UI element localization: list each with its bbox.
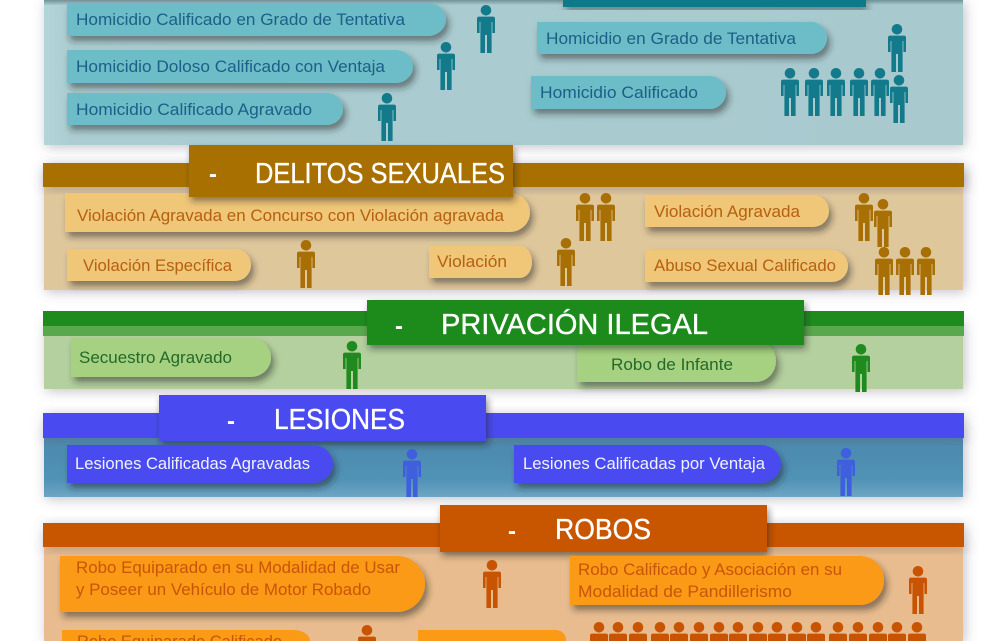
pill: Abuso Sexual Calificado [645, 250, 848, 282]
pill: Lesiones Calificadas por Ventaja: Lesiones Calificadas por Ventaja [523, 455, 766, 473]
heading: robos [440, 505, 767, 552]
pill: Robo Calificado y Asociación: Robo Calificado y Asociación en su [578, 561, 842, 579]
panel background: privación ilegal [44, 320, 963, 389]
panel background: homicidios [44, 0, 963, 145]
panel: lesiones [43, 395, 964, 497]
panel background: lesiones [44, 430, 963, 497]
pill: Robo Calificado y Asociación [570, 556, 884, 605]
panel: homicidios [44, 0, 963, 145]
band: privación ilegal [43, 311, 964, 336]
pill: Robo Equiparado en su Modalidad de Usar: y Poseer un Vehículo de Motor Robado [76, 581, 371, 599]
pill: Homicidio Calificado Agravado [67, 93, 343, 125]
pill: Homicidio Calificado: Homicidio Calificado [540, 84, 698, 102]
heading: delitos sexuales: DELITOS SEXUALES [255, 158, 505, 190]
band: delitos sexuales [43, 163, 964, 187]
icons: people privación ilegal [343, 341, 870, 392]
pill: Violación Agravada: Violación Agravada [654, 203, 801, 221]
pill: Robo Equiparado Calificado [62, 630, 310, 641]
heading: delitos sexuales: - [209, 161, 217, 188]
heading: privación ilegal: PRIVACIÓN ILEGAL [441, 308, 708, 341]
icons: people delitos sexuales [297, 193, 935, 295]
heading: lesiones: - [227, 408, 235, 435]
pill: Violación Específica [67, 249, 251, 281]
pill: Homicidio Doloso Calificado con Ventaja [67, 50, 413, 83]
heading: delitos sexuales [189, 145, 513, 197]
pill: Robo de Infante [577, 340, 776, 382]
pill: Lesiones Calificadas Agravadas [67, 445, 333, 483]
panel background: robos [44, 540, 963, 641]
heading: privación ilegal [367, 300, 804, 345]
heading: robos: ROBOS [555, 514, 651, 546]
pill: Violación Específica: Violación Específica [83, 257, 233, 275]
panel background: delitos sexuales [44, 170, 963, 290]
pill: Secuestro Agravado [71, 338, 271, 377]
pill: Violación Agravada en Concurso: Violación Agravada en Concurso con Violación agravada [77, 207, 505, 225]
pill: Homicidio en Grado de Tentativa: Homicidio en Grado de Tentativa [546, 30, 797, 48]
pill: Violación [429, 246, 532, 278]
pill: Robo Calificado y Asociación: Modalidad de Pandillerismo [578, 583, 792, 601]
pill: Lesiones Calificadas Agravadas: Lesiones Calificadas Agravadas [75, 455, 310, 473]
pill: Robo Equiparado en su Modalidad de Usar: Robo Equiparado en su Modalidad de Usar [76, 559, 401, 577]
panel: delitos sexuales [43, 145, 964, 295]
pill: Lesiones Calificadas por Ventaja [514, 445, 781, 483]
pill: Homicidio Calificado en Grado de Tentativa: Homicidio Calificado en Grado de Tentativa [76, 11, 406, 29]
heading: lesiones: LESIONES [274, 404, 405, 436]
pill: cropped [418, 630, 566, 641]
heading: robos: - [508, 518, 516, 545]
pill: Secuestro Agravado: Secuestro Agravado [79, 349, 232, 367]
heading bar: homicidios [563, 0, 866, 7]
pill: Robo de Infante: Robo de Infante [611, 356, 733, 374]
pill: Violación: Violación [437, 253, 507, 271]
pill: Homicidio Calificado [531, 76, 726, 109]
icons: people lesiones [403, 448, 855, 497]
pill: Robo Equiparado en su Modalidad de Usar [60, 556, 425, 612]
pill: Homicidio Calificado Agravado: Homicidio Calificado Agravado [76, 101, 312, 119]
band: lesiones [43, 413, 964, 438]
icons: people homicidios [378, 5, 908, 141]
pill: Violación Agravada [645, 195, 829, 227]
pill: Homicidio en Grado de Tentativa [537, 22, 827, 54]
pill: Homicidio Doloso Calificado con Ventaja: Homicidio Doloso Calificado con Ventaja [76, 58, 386, 76]
icons: people robos [358, 560, 927, 641]
pill: Homicidio Calificado en Grado de Tentativa [67, 3, 446, 36]
band: robos [43, 523, 964, 547]
pill: Abuso Sexual Calificado: Abuso Sexual Calificado [654, 257, 836, 275]
heading: privación ilegal: - [395, 313, 403, 340]
panel: privación ilegal [43, 300, 964, 392]
pill: Violación Agravada en Concurso [65, 193, 530, 232]
panel: robos [43, 505, 964, 641]
heading: lesiones [159, 395, 486, 441]
